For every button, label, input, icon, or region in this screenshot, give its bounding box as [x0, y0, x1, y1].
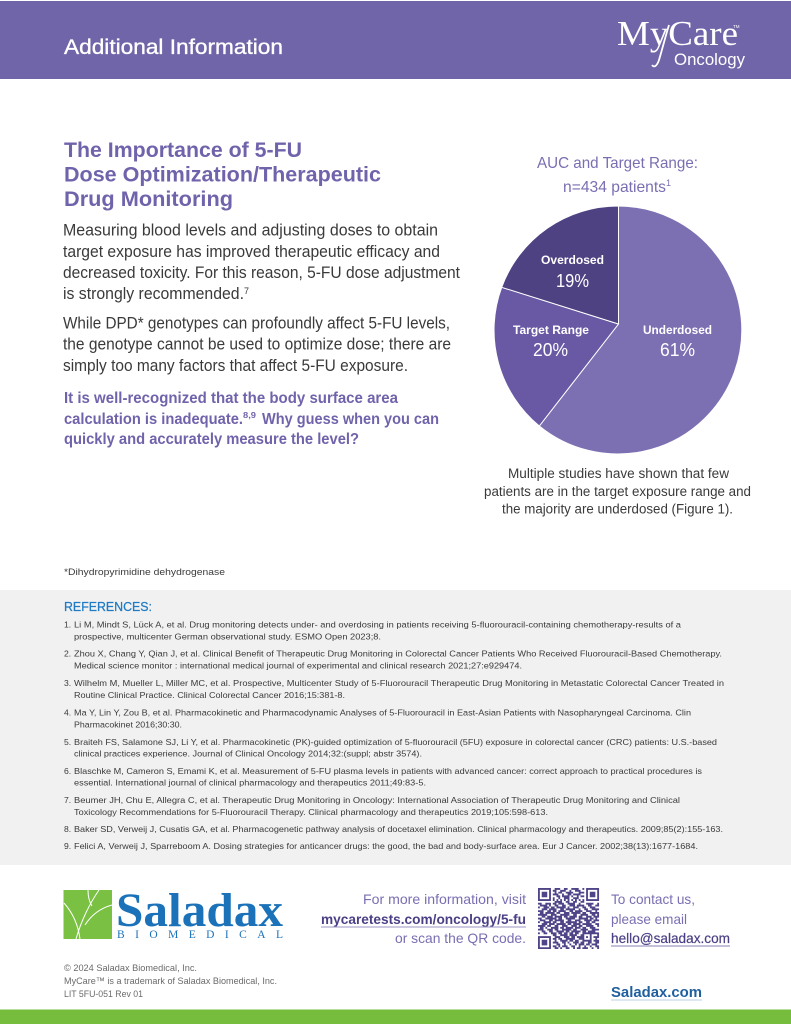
copyright notice: LIT 5FU-051 Rev 01: [64, 989, 143, 1000]
more information text: mycaretests.com/oncology/5-fu: [321, 911, 526, 927]
paragraph: DPD genotypes: While DPD* genotypes can profoundly affect 5-FU levels,: [63, 314, 450, 332]
copyright notice: [64, 963, 277, 1000]
heading: The Importance of 5-FU: [64, 139, 302, 162]
paragraph: blood levels: decreased toxicity. For this reason, 5-FU dose adjustment: [63, 264, 460, 282]
heading: [64, 139, 381, 211]
reference 5: Braiteh FS, Salamone SJ, Li Y, et al. Pharmacokinetic (PK)-guided optimization of 5-fluorouracil (5FU) exposure in colorectal cancer (CRC) patients: U.S.-based: [74, 737, 717, 747]
MyCare Oncology logo: MyCare: [617, 14, 738, 53]
paragraph: blood levels: target exposure has improved therapeutic efficacy and: [63, 243, 440, 261]
copyright notice: MyCare™ is a trademark of Saladax Biomedical, Inc.: [64, 976, 277, 987]
label: target range: 20%: [533, 340, 568, 360]
callout: body surface area: 8,9: [243, 410, 256, 420]
header band: [0, 1, 791, 79]
reference 6: essential. International journal of clinical pharmacology and therapeutics 2011;49:83-5.: [74, 778, 426, 788]
reference 9: 9.: [64, 841, 71, 851]
Saladax Biomedical logo: [64, 884, 283, 941]
heading: Dose Optimization/Therapeutic: [64, 164, 381, 186]
reference 1: Li M, Mindt S, Lück A, et al. Drug monitoring detects under- and overdosing in patients receiving 5-fluorouracil-containing chemotherapy-results of a: [74, 620, 681, 630]
reference 7: 7.: [64, 795, 71, 805]
reference 4: [64, 708, 691, 730]
label: overdosed: Overdosed: [541, 255, 604, 267]
reference 5: [64, 737, 717, 758]
reference 3: 3.: [64, 678, 71, 688]
chart title: 1: [666, 178, 671, 188]
callout: body surface area: calculation is inadequate.: [64, 411, 243, 428]
more information text: For more information, visit: [363, 891, 526, 907]
reference 6: Blaschke M, Cameron S, Emami K, et al. Measurement of 5-FU plasma levels in patients with advanced cancer: correct approach to practical procedures is: [74, 766, 702, 776]
reference 3: Wilhelm M, Mueller L, Miller MC, et al. Prospective, Multicenter Study of 5-Fluorouracil Therapeutic Drug Monitoring in Metastatic Colorectal Cancer Treated in: [74, 678, 724, 688]
reference 1: [64, 620, 681, 642]
reference 1: prospective, multicenter German observational study. ESMO Open 2023;8.: [74, 632, 381, 642]
chart title: [537, 155, 698, 196]
heading: Drug Monitoring: [64, 188, 233, 211]
reference 8: 8.: [64, 824, 71, 834]
callout: body surface area: Why guess when you can: [262, 411, 439, 428]
Saladax Biomedical logo: Saladax: [116, 884, 283, 937]
reference 6: [64, 766, 702, 788]
copyright notice: © 2024 Saladax Biomedical, Inc.: [64, 963, 197, 974]
reference 4: Pharmacokinet 2016;30:30.: [74, 720, 182, 730]
reference 9: Felici A, Verweij J, Sparreboom A. Dosing strategies for anticancer drugs: the good, the bad and body-surface area. Eur J Cancer. 2002;38(13):1677-1684.: [74, 841, 698, 851]
paragraph: DPD genotypes: the genotype cannot be used to optimize dose; there are: [63, 336, 451, 354]
contact text: please email: [611, 911, 687, 927]
paragraph: blood levels: [63, 222, 460, 303]
label: underdosed: Underdosed: [643, 325, 712, 337]
Saladax Biomedical logo: BIOMEDICAL: [117, 929, 283, 941]
reference 8: Baker SD, Verweij J, Cusatis GA, et al. Pharmacogenetic pathway analysis of docetaxel elimination. Clinical pharmacology and therapeutics. 2009;85(2):155-163.: [74, 824, 723, 834]
label: target range: Target Range: [513, 325, 589, 337]
reference 4: Ma Y, Lin Y, Zou B, et al. Pharmacokinetic and Pharmacodynamic Analyses of 5-Fluorouracil in East-Asian Patients with Nasopharyngeal Carcinoma. Clin: [74, 708, 691, 718]
chart caption: patients are in the target exposure range and: [484, 484, 751, 499]
label: underdosed: 61%: [660, 340, 695, 360]
chart caption: the majority are underdosed (Figure 1).: [502, 502, 733, 516]
panel: references: [0, 590, 791, 865]
MyCare Oncology logo: [617, 14, 746, 69]
callout: body surface area: quickly and accurately measure the level?: [64, 431, 359, 448]
reference 2: Medical science monitor : international medical journal of experimental and clinical research 2021;27:e929474.: [74, 660, 522, 670]
chart title: AUC and Target Range:: [537, 155, 698, 172]
reference 2: 2.: [64, 648, 71, 658]
callout: body surface area: [64, 390, 439, 448]
slice: target range: [494, 287, 618, 426]
green footer bar: [0, 1010, 791, 1024]
MyCare Oncology logo: Oncology: [674, 51, 746, 69]
reference 2: Zhou X, Chang Y, Qian J, et al. Clinical Benefit of Therapeutic Drug Monitoring in Colorectal Cancer Patients Who Received Fluorouracil-Based Chemotherapy.: [74, 648, 722, 658]
icon: green leaf square: [64, 890, 112, 939]
slice: underdosed: [539, 206, 742, 454]
paragraph: blood levels: Measuring blood levels and adjusting doses to obtain: [63, 222, 438, 240]
slice: overdosed: [502, 206, 618, 324]
references heading: REFERENCES:: [64, 600, 152, 614]
reference 7: Beumer JH, Chu E, Allegra C, et al. Therapeutic Drug Monitoring in Oncology: International Association of Therapeutic Drug Monitoring and Clinical: [74, 795, 680, 805]
contact text: To contact us,: [611, 891, 695, 907]
reference 2: [64, 648, 722, 670]
chart title: n=434 patients: [563, 179, 666, 196]
more information text: [321, 891, 526, 946]
chart caption: Multiple studies have shown that few: [508, 466, 729, 481]
callout: body surface area: It is well-recognized that the body surface area: [64, 390, 398, 407]
label: underdosed: [643, 325, 712, 360]
chart caption: [484, 466, 751, 516]
reference 7: Toxicology Recommendations for 5-Fluorouracil Therapy. Clinical pharmacology and therapeutics 2019;105:598-613.: [74, 807, 548, 817]
paragraph: blood levels: is strongly recommended.: [63, 285, 244, 303]
website link: Saladax.com: [611, 984, 702, 1001]
reference 1: 1.: [64, 620, 71, 630]
label: overdosed: 19%: [556, 271, 589, 291]
reference 5: clinical practices experience. Journal of Clinical Oncology 2014;32:(suppl; abstr 3574).: [74, 748, 422, 758]
label: overdosed: [541, 255, 604, 291]
footnote: *Dihydropyrimidine dehydrogenase: [64, 567, 225, 578]
reference 4: 4.: [64, 708, 71, 718]
paragraph: blood levels: 7: [244, 286, 249, 296]
label: target range: [513, 325, 589, 360]
paragraph: DPD genotypes: [63, 314, 451, 375]
contact text: hello@saladax.com: [611, 930, 730, 946]
reference 6: 6.: [64, 766, 71, 776]
reference 5: 5.: [64, 737, 71, 747]
pie chart: [494, 206, 742, 454]
QR code: [538, 888, 599, 949]
header title: Additional Information: [64, 36, 283, 59]
reference 3: Routine Clinical Practice. Clinical Colorectal Cancer 2016;15:381-8.: [74, 690, 345, 700]
reference 7: [64, 795, 680, 817]
contact text: [611, 891, 730, 946]
reference 3: [64, 678, 724, 700]
MyCare Oncology logo: TM: [733, 24, 740, 29]
more information text: or scan the QR code.: [395, 930, 526, 946]
paragraph: DPD genotypes: simply too many factors that affect 5-FU exposure.: [63, 357, 408, 375]
